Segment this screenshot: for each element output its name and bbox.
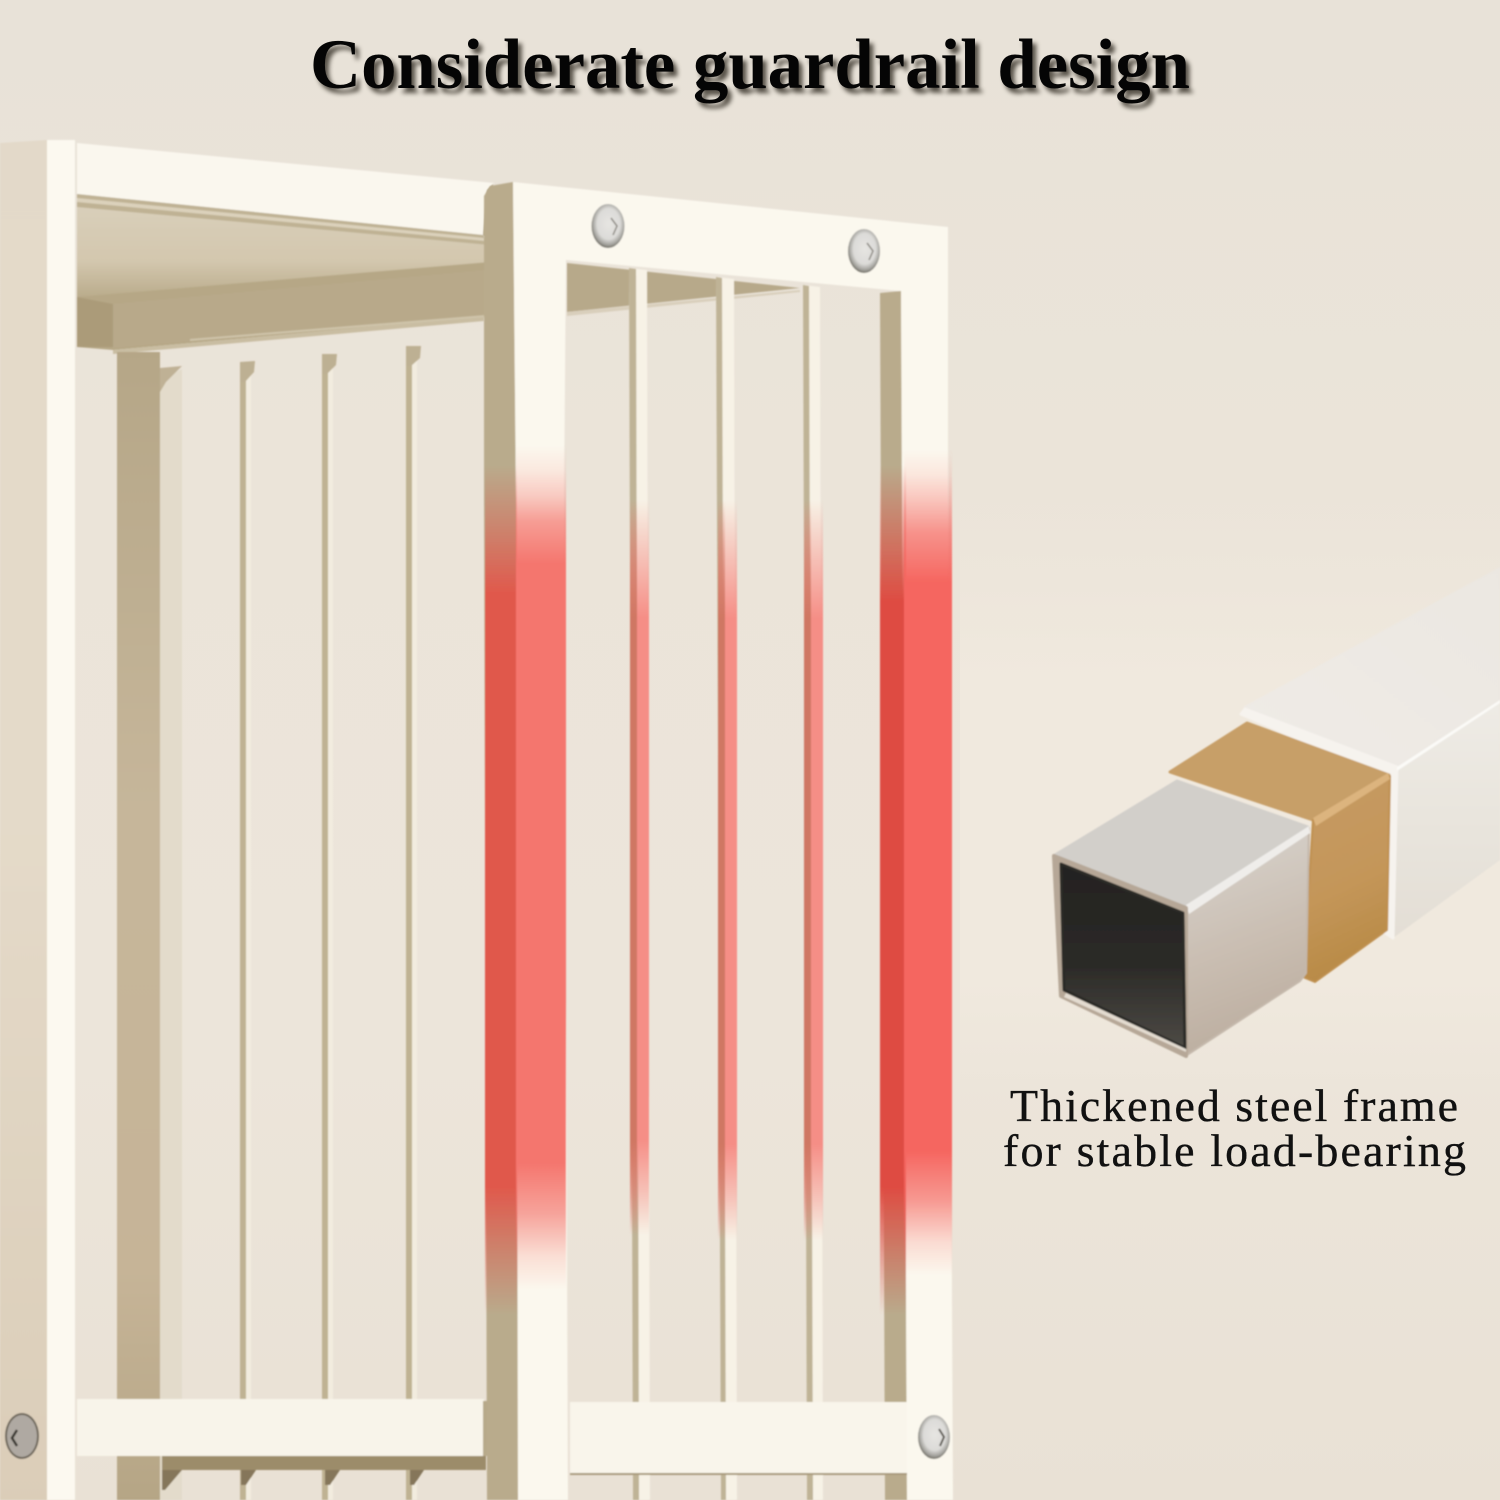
tube backdrop glow xyxy=(960,500,1500,1100)
title: Considerate guardrail design xyxy=(310,26,1190,104)
back upright post xyxy=(117,352,182,1500)
frame top rail and posts xyxy=(513,182,953,1500)
gold collar xyxy=(1170,723,1390,982)
rivet: frame top right xyxy=(848,229,880,273)
rivet: left post xyxy=(5,1413,39,1459)
front bar 2 xyxy=(716,277,737,1500)
panel: left shelf frame xyxy=(0,140,494,1500)
rivet: frame bottom right xyxy=(918,1415,950,1459)
panel: steel tube cross-section xyxy=(1054,567,1500,1056)
bottom rail xyxy=(77,1399,484,1456)
frame right inner face xyxy=(880,291,907,1500)
frame left post side face xyxy=(484,182,518,1500)
red zone: right post front xyxy=(904,450,952,1275)
front bar 1 xyxy=(629,268,650,1500)
rivet: frame top left xyxy=(592,204,624,248)
bottom rail shadow band xyxy=(162,1456,486,1470)
top rail xyxy=(77,143,494,245)
caption xyxy=(1003,1080,1466,1176)
back shelf seen through frame xyxy=(567,263,800,312)
left post front face xyxy=(47,140,75,1500)
red zone: right post side xyxy=(880,465,906,1315)
caption line 2: for stable load-bearing xyxy=(1003,1125,1466,1176)
bottom rail brackets xyxy=(162,1470,424,1490)
silver inner tube xyxy=(1055,781,1310,1055)
red zone: left post front xyxy=(516,445,566,1290)
back bar 1 xyxy=(240,361,255,1500)
frame bottom rail xyxy=(570,1402,907,1473)
white coated tube xyxy=(1241,567,1500,938)
red zone: left post side xyxy=(485,465,517,1315)
tube opening xyxy=(1054,856,1186,1056)
shelf lower beam xyxy=(77,262,490,350)
panel: front guardrail frame xyxy=(484,182,953,1500)
left post side face xyxy=(0,140,47,1500)
back bar 2 xyxy=(322,354,337,1500)
shelf underside shading xyxy=(77,205,490,298)
front bar 3 xyxy=(803,285,823,1500)
back bar 3 xyxy=(406,346,421,1500)
caption line 1: Thickened steel frame xyxy=(1010,1080,1458,1131)
